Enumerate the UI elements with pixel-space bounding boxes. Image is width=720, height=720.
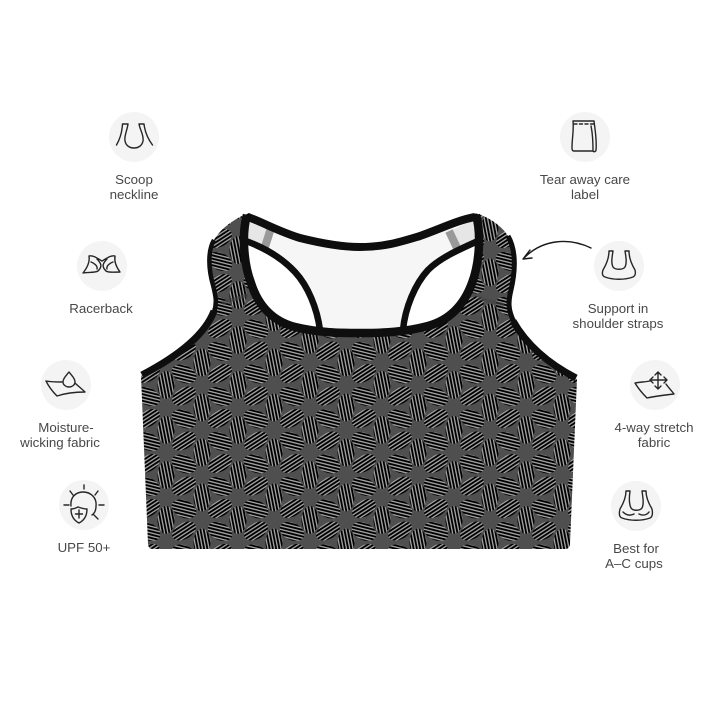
label: racerback: Racerback (69, 301, 133, 316)
feature: scoop neckline (109, 112, 159, 202)
icon: support straps (594, 241, 644, 291)
icon: UPF sun and shield (59, 480, 109, 530)
label: moisture-wicking fabric: wicking fabric (19, 435, 100, 450)
feature: best for A–C cups (605, 481, 663, 571)
icon: 4-way stretch fabric (630, 360, 680, 410)
left shoulder seam (222, 295, 248, 303)
right lower edge binding (513, 321, 576, 378)
label: support in shoulder straps: Support in (588, 301, 648, 316)
right upper edge binding (508, 236, 514, 322)
sports bra product (141, 213, 577, 549)
feature: racerback (69, 241, 133, 316)
left inner corner (246, 220, 274, 252)
right shoulder seam (478, 298, 504, 305)
label: best for A–C cups: Best for (613, 541, 659, 556)
neckline binding (248, 217, 475, 247)
label: 4-way stretch fabric: 4-way stretch (614, 420, 694, 435)
icon: bra cups (611, 481, 661, 531)
label: 4-way stretch fabric: fabric (638, 435, 671, 450)
icon: tear away label (560, 112, 610, 162)
icon: moisture-wicking fabric (41, 360, 91, 410)
label: scoop neckline: Scoop (115, 172, 153, 187)
feature: support in shoulder straps (573, 241, 664, 331)
left upper edge binding (209, 240, 216, 312)
right inner corner (448, 220, 478, 252)
label: support in shoulder straps: shoulder straps (573, 316, 664, 331)
left strap binding (246, 241, 320, 330)
left armhole opening (245, 241, 320, 330)
back panel (244, 217, 479, 333)
scoop binding (244, 215, 479, 333)
feature: moisture-wicking fabric (19, 360, 100, 450)
label: moisture-wicking fabric: Moisture- (38, 420, 94, 435)
feature: 4-way stretch fabric (614, 360, 694, 450)
label: best for A–C cups: A–C cups (605, 556, 663, 571)
label: scoop neckline: neckline (110, 187, 158, 202)
right strap binding (403, 241, 478, 330)
label: tear away care label: Tear away care (540, 172, 630, 187)
patterned fabric body (141, 213, 577, 549)
left gray strap (264, 228, 271, 250)
label: UPF 50+: UPF 50+ (58, 540, 111, 555)
right armhole opening (403, 241, 478, 330)
feature: tear away care label (540, 112, 630, 202)
right gray strap (449, 231, 458, 250)
icon: scoop neckline (109, 112, 159, 162)
left lower edge binding (142, 311, 214, 375)
feature: UPF 50+ (58, 480, 111, 555)
arrow pointing to shoulder strap (523, 242, 591, 259)
icon: racerback (77, 241, 127, 291)
label: tear away care label: label (571, 187, 599, 202)
